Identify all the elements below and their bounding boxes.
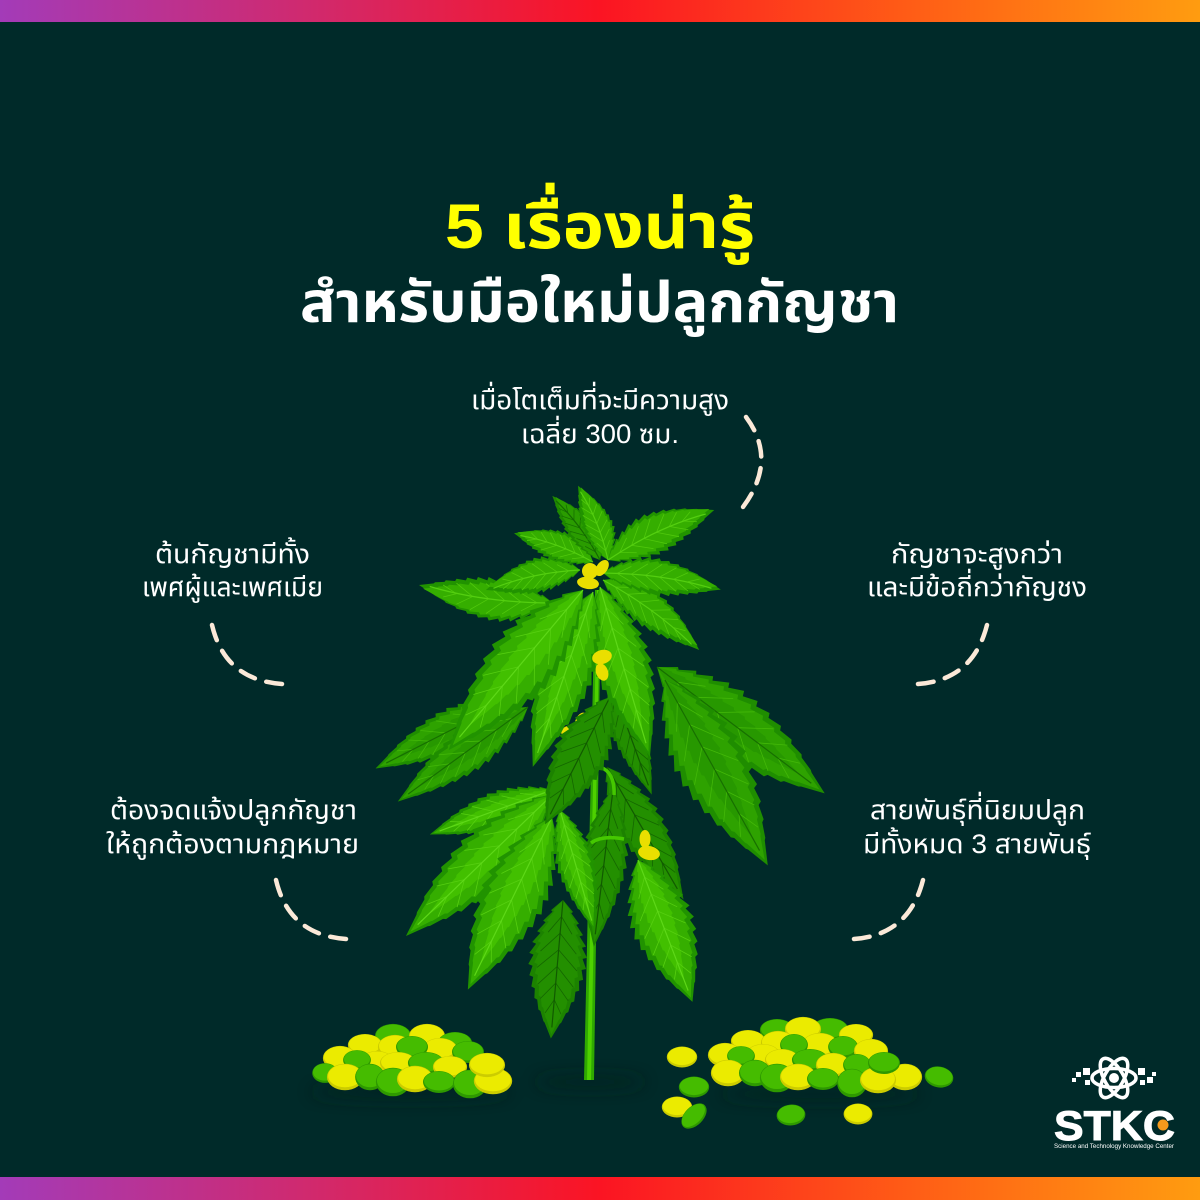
- caption: strains: มีทั้งหมด 3 สายพันธุ์: [863, 827, 1091, 860]
- caption: legal notice: ต้องจดแจ้งปลูกกัญชา: [110, 795, 357, 826]
- orange dot: [1158, 1120, 1168, 1130]
- tagline: Science and Technology Knowledge Center: [1054, 1144, 1174, 1150]
- title line 1: 5 เรื่องน่ารู้: [445, 182, 755, 265]
- bottom gradient bar: [0, 1177, 1200, 1200]
- arrow: left lower caption: [276, 880, 346, 939]
- top crown leaves: [592, 566, 715, 656]
- logo: STKC: [1054, 1054, 1175, 1150]
- top gradient bar: [0, 0, 1200, 22]
- caption: legal notice: [106, 795, 359, 860]
- caption: sexes: เพศผู้และเพศเมีย: [142, 572, 323, 603]
- lower leaves: [522, 897, 592, 1041]
- dashed arrows: [212, 417, 987, 939]
- caption: sexes: [142, 537, 323, 603]
- bud: middle lower: [560, 711, 589, 739]
- icon: atom: [1072, 1054, 1156, 1102]
- title line 2: สำหรับมือใหม่ปลูกกัญชา: [300, 271, 899, 337]
- seed pile left: [312, 1024, 512, 1098]
- arrow: top caption: [743, 417, 761, 507]
- seed pile right: [708, 1017, 922, 1097]
- caption: height: เมื่อโตเต็มที่จะมีความสูง: [471, 381, 729, 416]
- caption: sexes: ต้นกัญชามีทั้ง: [155, 537, 310, 569]
- caption: height: [471, 381, 729, 449]
- caption: hemp comparison: และมีข้อถี่กว่ากัญชง: [867, 568, 1087, 602]
- arrow: right lower caption: [854, 880, 923, 939]
- arrow: left upper caption: [212, 625, 282, 684]
- title: [300, 182, 899, 337]
- scattered seeds: [662, 1047, 955, 1133]
- bud: middle upper: [591, 648, 613, 683]
- bud: top: [576, 557, 612, 590]
- caption: hemp comparison: [867, 539, 1087, 602]
- bud: lower right: [637, 830, 661, 862]
- arrow: right upper caption: [918, 625, 987, 684]
- ground shadows: [310, 1076, 920, 1100]
- branches: [591, 680, 624, 843]
- middle bright leaves: [572, 579, 678, 765]
- cannabis plant: [366, 479, 845, 1080]
- caption: height: เฉลี่ย 300 ซม.: [521, 415, 679, 449]
- center leaf: [521, 684, 635, 837]
- wordmark: STKC: [1054, 1102, 1175, 1149]
- caption: strains: สายพันธุ์ที่นิยมปลูก: [870, 791, 1085, 826]
- caption: hemp comparison: กัญชาจะสูงกว่า: [891, 539, 1063, 570]
- caption: strains: [863, 791, 1091, 860]
- back leaves left: [366, 681, 520, 788]
- stem: [584, 590, 601, 1080]
- back leaves right: [637, 640, 845, 820]
- caption: legal notice: ให้ถูกต้องตามกฎหมาย: [106, 829, 359, 860]
